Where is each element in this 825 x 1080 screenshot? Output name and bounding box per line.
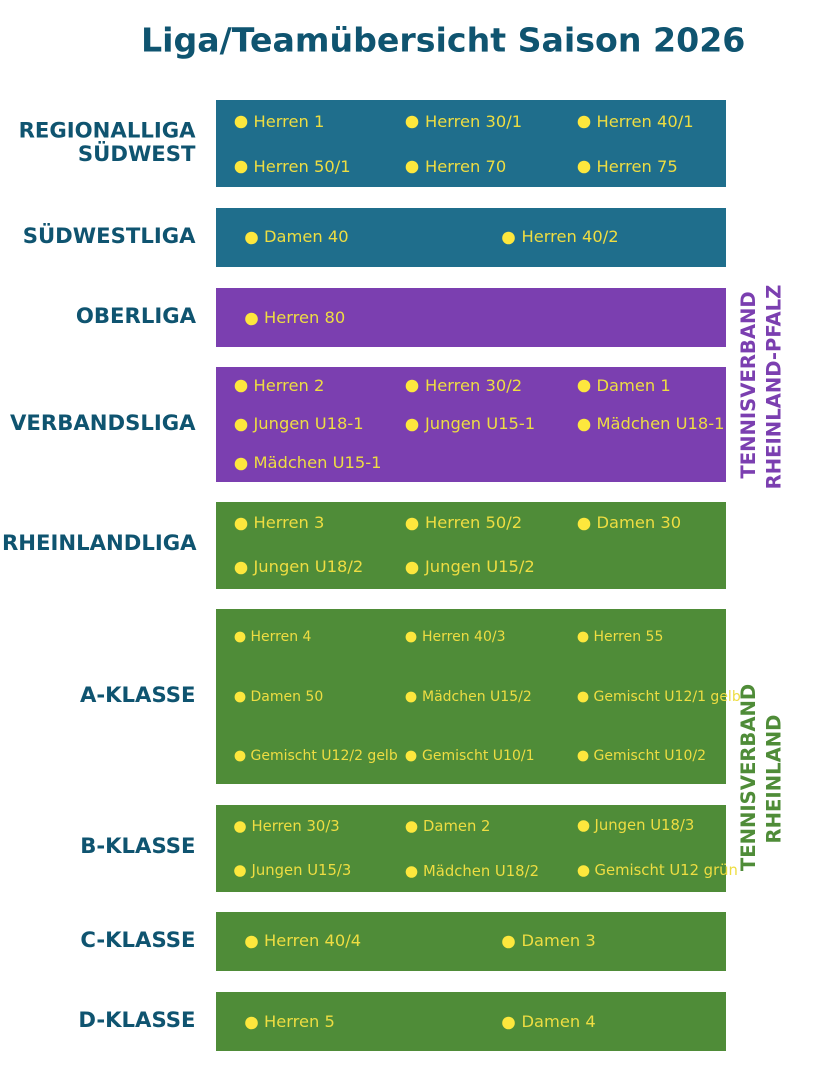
panel: Verbandsliga: Damen 1: [596, 376, 671, 395]
panel: Südwestliga: Herren 40/2: [522, 227, 619, 246]
side label: Tennisverband Rheinland: [737, 684, 786, 871]
panel: Regionalliga Südwest: Herren 70: [425, 157, 506, 176]
panel: D-Klasse: Damen 4: [522, 1012, 596, 1031]
panel: B-Klasse: Gemischt U12 grün: [594, 862, 738, 879]
panel: Regionalliga Südwest: SÜDWEST: [78, 141, 196, 166]
panel: D-Klasse: Herren 5: [264, 1012, 335, 1031]
panel: B-Klasse: Mädchen U18/2: [423, 863, 539, 880]
panel: Rheinlandliga: Damen 30: [596, 513, 681, 532]
side label: Tennisverband Rheinland-Pfalz: [737, 285, 786, 489]
panel: B-Klasse: Herren 30/3: [252, 818, 340, 835]
panel: A-Klasse: Herren 40/3: [422, 629, 505, 645]
panel: Oberliga: OBERLIGA: [76, 303, 197, 328]
panel: Verbandsliga: Mädchen U18-1: [596, 414, 725, 433]
panel: Südwestliga: SÜDWESTLIGA: [23, 223, 196, 248]
panel: Regionalliga Südwest: REGIONALLIGA: [19, 118, 196, 142]
panel: C-Klasse: [80, 912, 726, 971]
panel: A-Klasse: Mädchen U15/2: [422, 689, 532, 705]
panel: Rheinlandliga: [2, 502, 726, 589]
panel: A-Klasse: Gemischt U12/1 gelb: [594, 689, 741, 705]
side label: Tennisverband Rheinland-Pfalz: RHEINLAND-PFALZ: [762, 285, 786, 489]
panel: Rheinlandliga: Herren 50/2: [425, 513, 522, 532]
side label: Tennisverband Rheinland: RHEINLAND: [762, 715, 786, 843]
panel: D-Klasse: [78, 992, 726, 1051]
panel: Regionalliga Südwest: Herren 50/1: [254, 157, 351, 176]
side label: Tennisverband Rheinland-Pfalz: TENNISVERBAND: [737, 291, 760, 479]
panel: B-Klasse: [80, 805, 738, 892]
panel: B-Klasse: B-KLASSE: [80, 833, 196, 858]
side label: Tennisverband Rheinland: TENNISVERBAND: [737, 684, 760, 871]
panel: Rheinlandliga: RHEINLANDLIGA: [2, 530, 197, 555]
panel: Oberliga: Herren 80: [264, 308, 345, 327]
panel: Verbandsliga: Herren 2: [254, 376, 324, 395]
panel: Verbandsliga: Herren 30/2: [425, 376, 522, 395]
panel: Südwestliga: Damen 40: [264, 227, 349, 246]
panel: C-Klasse: Damen 3: [522, 931, 596, 950]
panel: A-Klasse: Damen 50: [250, 689, 323, 705]
panel: Verbandsliga: Jungen U15-1: [424, 414, 535, 433]
panel: Rheinlandliga: Jungen U15/2: [424, 557, 535, 576]
panel: Rheinlandliga: Herren 3: [254, 513, 324, 532]
panel: Regionalliga Südwest: Herren 30/1: [425, 112, 522, 131]
panel: B-Klasse: Jungen U18/3: [594, 817, 694, 834]
panel: B-Klasse: Jungen U15/3: [250, 862, 351, 879]
panel: Regionalliga Südwest: Herren 40/1: [596, 112, 694, 131]
panel: Oberliga: [76, 288, 726, 347]
panel: A-Klasse: Herren 4: [250, 629, 312, 645]
panel: A-Klasse: Gemischt U10/1: [422, 748, 534, 764]
panel: Regionalliga Südwest: Herren 1: [254, 112, 324, 131]
panel: C-Klasse: C-KLASSE: [80, 927, 196, 952]
panel: Verbandsliga: [10, 367, 726, 482]
panel: A-Klasse: Gemischt U10/2: [594, 748, 706, 764]
panel: A-Klasse: Gemischt U12/2 gelb: [250, 748, 398, 764]
panel: Verbandsliga: VERBANDSLIGA: [10, 410, 196, 435]
panel: B-Klasse: Damen 2: [423, 818, 490, 835]
panel: Regionalliga Südwest: Herren 75: [596, 157, 678, 176]
panel: Verbandsliga: Jungen U18-1: [252, 414, 364, 433]
title: Liga/Teamübersicht Saison 2026: [141, 20, 745, 60]
panel: Rheinlandliga: Jungen U18/2: [252, 557, 363, 576]
panel: A-Klasse: [80, 609, 741, 784]
panel: D-Klasse: D-KLASSE: [78, 1007, 196, 1032]
panel: A-Klasse: Herren 55: [594, 629, 663, 645]
panel: Regionalliga Südwest: [19, 100, 726, 187]
panel: A-Klasse: A-KLASSE: [80, 682, 196, 707]
panel: C-Klasse: Herren 40/4: [264, 931, 361, 950]
panel: Südwestliga: [23, 208, 726, 267]
panel: Verbandsliga: Mädchen U15-1: [254, 453, 382, 472]
